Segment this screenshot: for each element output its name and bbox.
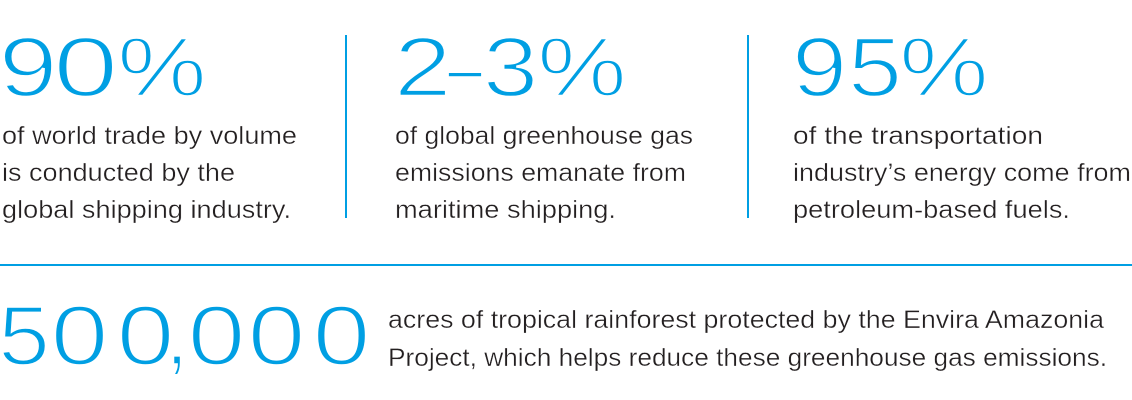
text block: world trade description: global shipping industry. xyxy=(2,196,291,224)
big number: 2–3%: 3 xyxy=(483,20,538,114)
big number: 2–3% xyxy=(394,19,627,115)
big number: 95%: 9 xyxy=(792,20,847,114)
text block: world trade description xyxy=(2,122,297,224)
big number: 500,000 xyxy=(0,288,370,383)
panel: world trade statistic xyxy=(0,20,297,224)
big number: 90%: 9 xyxy=(0,21,58,114)
big number: 95% xyxy=(792,20,989,114)
panel: transportation energy statistic xyxy=(792,20,1131,224)
big number: 2–3%: – xyxy=(448,19,482,114)
big number: 2–3%: 2 xyxy=(394,20,452,115)
panel: greenhouse gas statistic xyxy=(394,19,693,224)
text block: greenhouse gas description: maritime shipping. xyxy=(395,196,616,224)
big number: 95%: % xyxy=(899,20,989,114)
text block: world trade description: is conducted by the xyxy=(2,159,235,187)
big number: 500,000: , xyxy=(165,288,189,382)
big number: 500,000: 0 xyxy=(313,289,370,383)
text block: greenhouse gas description xyxy=(395,122,693,224)
text block: transportation energy description: of the transportation xyxy=(793,122,1043,150)
text block: rainforest description: acres of tropical rainforest protected by the Envira Amazonia xyxy=(388,306,1104,334)
text block: transportation energy description: petroleum-based fuels. xyxy=(793,196,1070,224)
panel: rainforest protection statistic xyxy=(0,288,1107,383)
big number: 90%: 0 xyxy=(53,20,118,114)
big number: 95%: 5 xyxy=(848,21,902,114)
text block: rainforest description: Project, which helps reduce these greenhouse gas emissions. xyxy=(388,344,1107,372)
big number: 90%: % xyxy=(117,20,207,114)
big number: 500,000: 0 xyxy=(117,289,174,383)
big number: 90% xyxy=(0,20,207,114)
text block: rainforest description xyxy=(388,306,1107,372)
text block: transportation energy description: industry’s energy come from xyxy=(793,159,1131,187)
big number: 2–3%: % xyxy=(537,20,627,114)
big number: 500,000: 0 xyxy=(248,289,305,383)
big number: 500,000: 0 xyxy=(51,289,108,383)
text block: transportation energy description xyxy=(793,122,1131,224)
big number: 500,000: 0 xyxy=(188,289,245,383)
text block: greenhouse gas description: of global greenhouse gas xyxy=(395,122,693,150)
text block: greenhouse gas description: emissions emanate from xyxy=(395,159,686,187)
text block: world trade description: of world trade by volume xyxy=(2,122,297,150)
